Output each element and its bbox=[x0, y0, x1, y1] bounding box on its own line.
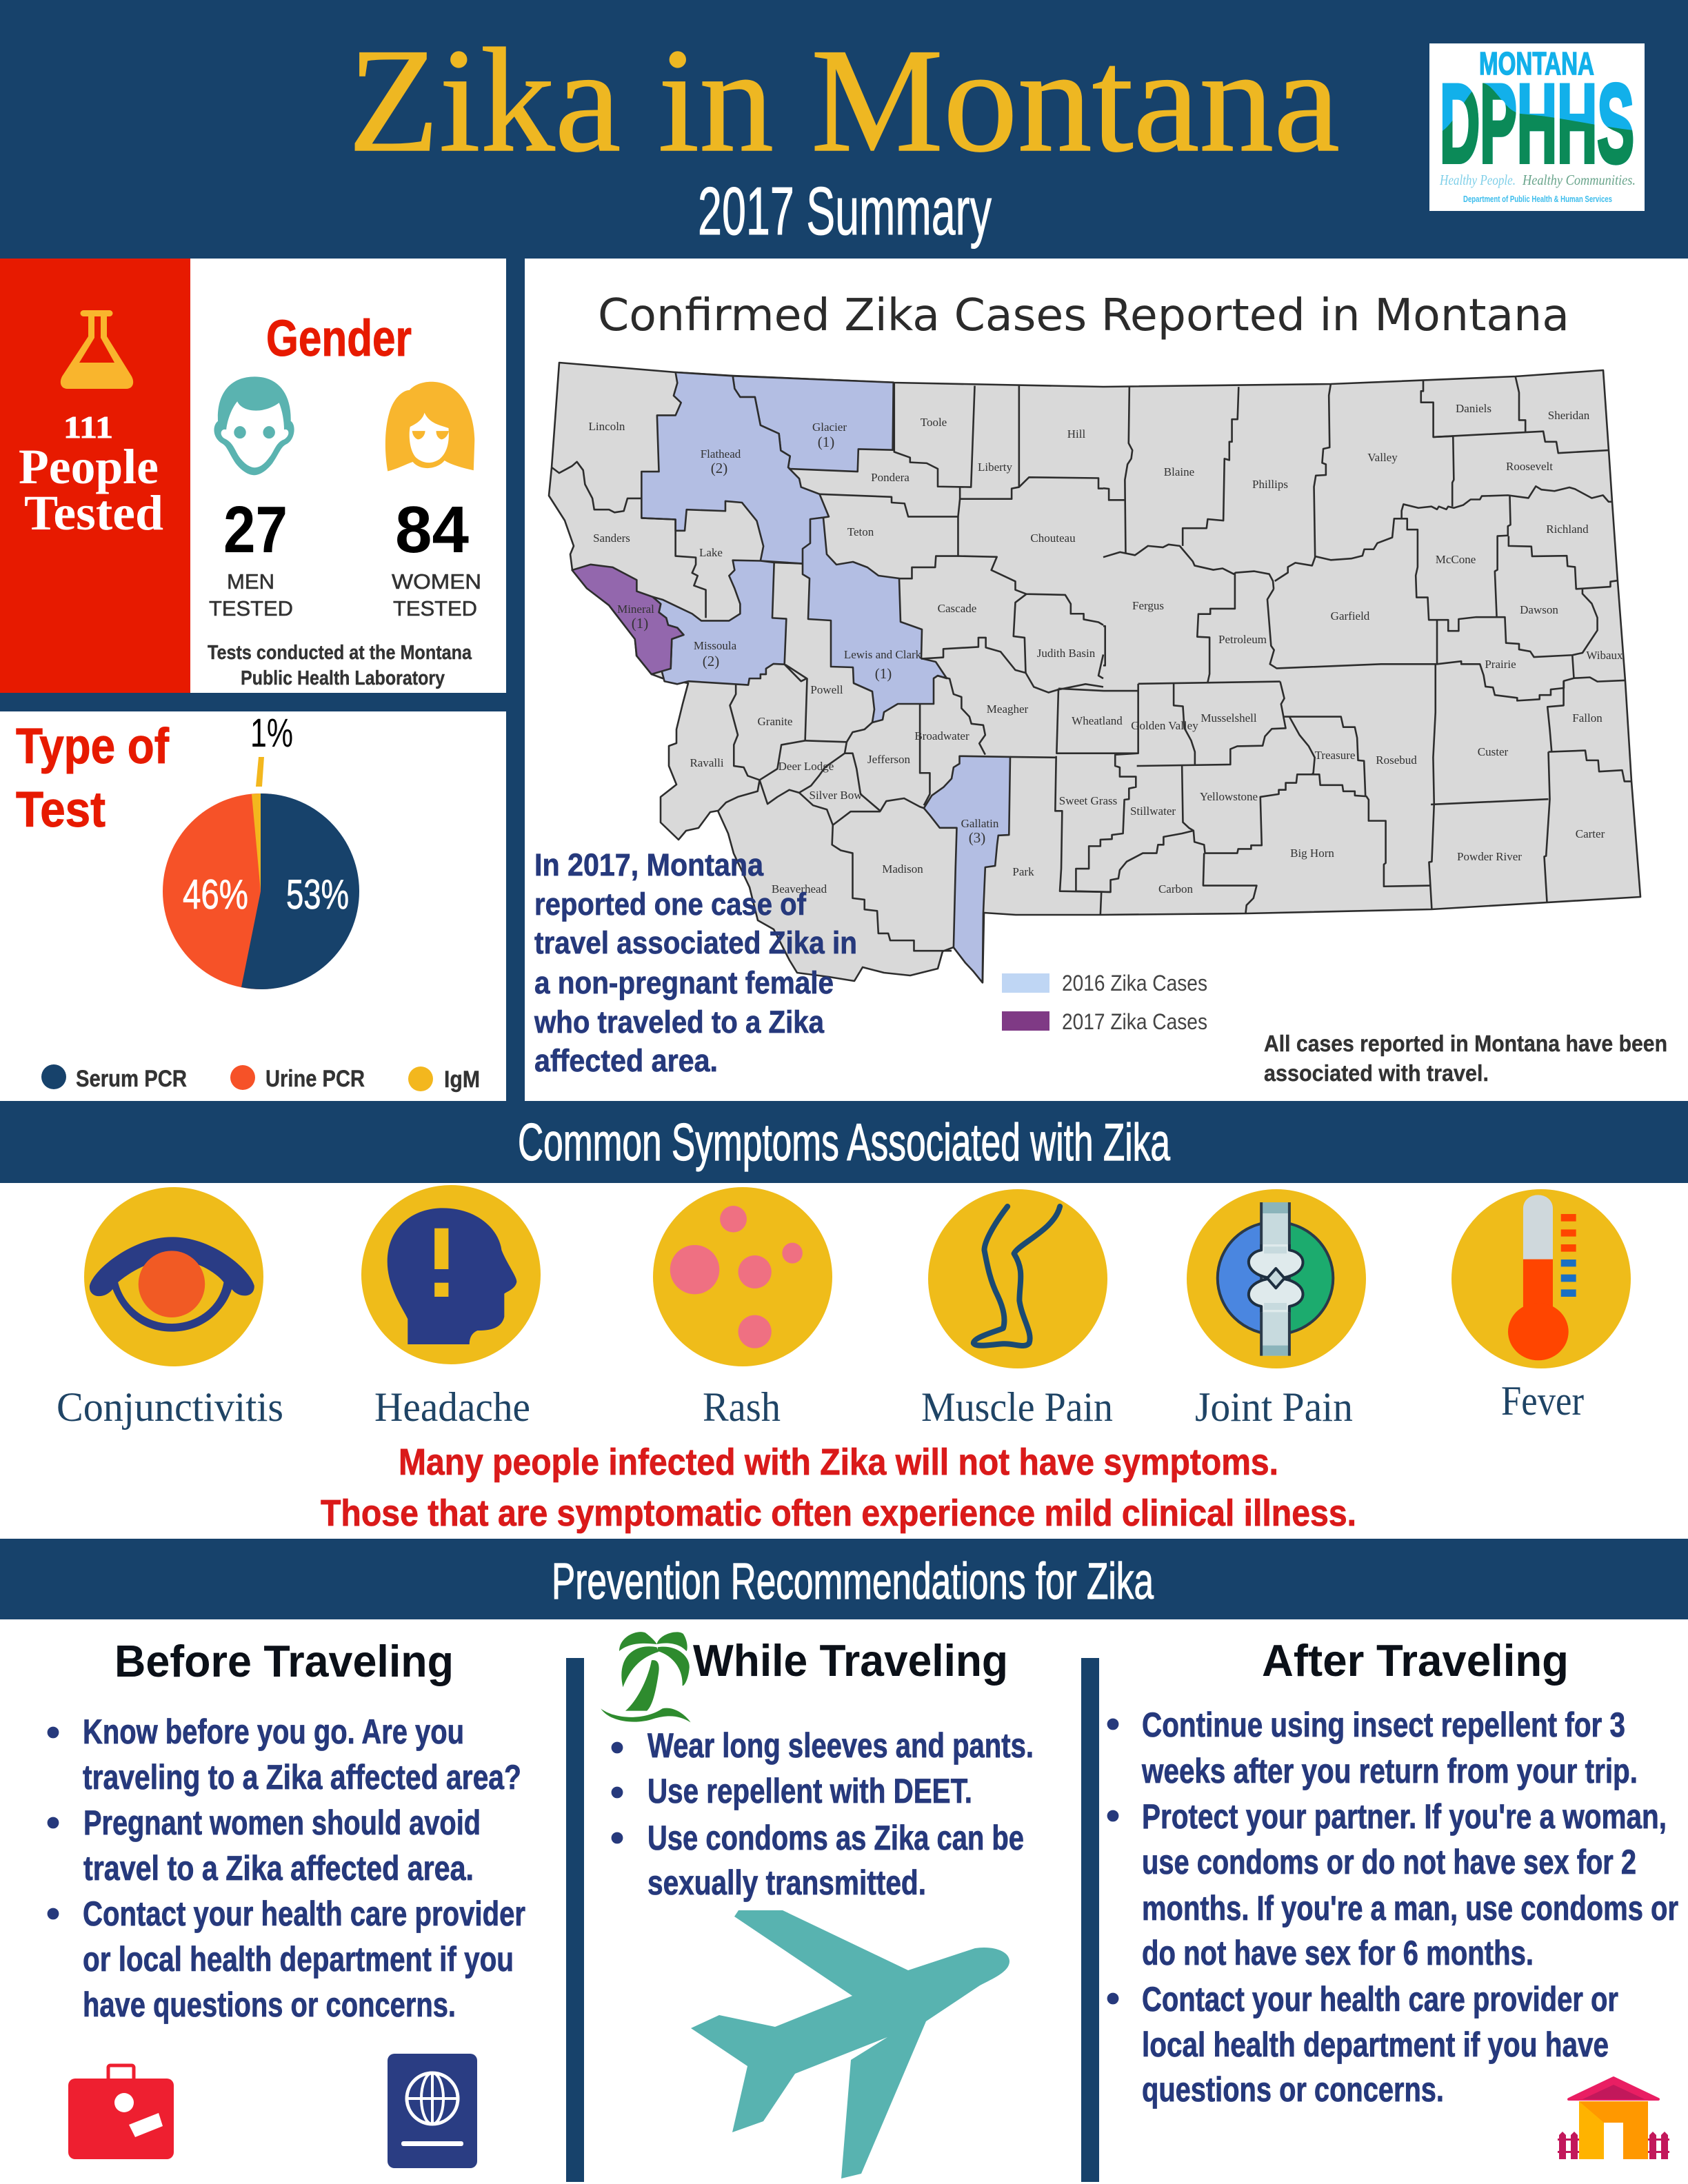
county labels: Sweet Grass bbox=[1059, 794, 1117, 807]
men tested: 27 bbox=[223, 493, 288, 567]
county labels: Ravalli bbox=[690, 756, 724, 769]
county labels: Park bbox=[1012, 865, 1034, 878]
county labels: Valley bbox=[1367, 451, 1398, 464]
county labels: Broadwater bbox=[914, 729, 969, 742]
county labels: (2) bbox=[703, 653, 719, 669]
heading: While Traveling bbox=[693, 1635, 1008, 1686]
county labels: Powder River bbox=[1457, 850, 1522, 863]
text: 2017 case narrative: affected area. bbox=[534, 1043, 718, 1078]
logo: Montana DPHHS: Healthy Communities. bbox=[1522, 172, 1636, 188]
icon: passport bbox=[388, 2054, 477, 2168]
pie chart: 53% bbox=[286, 871, 349, 918]
note: travel associated: associated with travel. bbox=[1264, 1060, 1489, 1086]
callout: mild illness: Many people infected with Zika will not have symptoms. bbox=[399, 1442, 1278, 1483]
note: laboratory bbox=[208, 642, 472, 689]
pie legend: IgM bbox=[444, 1066, 480, 1093]
county labels: (2) bbox=[711, 460, 727, 476]
symptom: fever: Fever bbox=[1501, 1378, 1584, 1424]
county labels: Daniels bbox=[1456, 402, 1491, 415]
people tested count: People bbox=[19, 439, 159, 494]
pie legend: Serum PCR bbox=[76, 1066, 187, 1092]
county labels: Fallon bbox=[1572, 711, 1602, 725]
bullet list: Pregnant women should avoid bbox=[83, 1803, 481, 1842]
county borders: northwest bbox=[552, 383, 1103, 693]
heading: type of test: Type of bbox=[16, 719, 170, 774]
county labels: Garfield bbox=[1331, 609, 1370, 623]
text: 2017 case narrative: who traveled to a Zika bbox=[534, 1004, 825, 1040]
county labels: Flathead bbox=[701, 447, 741, 461]
county labels: Deer Lodge bbox=[778, 760, 834, 773]
county labels: Phillips bbox=[1252, 478, 1288, 491]
men tested bbox=[209, 493, 293, 620]
county borders: southeast bbox=[1055, 665, 1631, 915]
bullet list: Use condoms as Zika can be bbox=[647, 1819, 1024, 1857]
county labels: Lake bbox=[699, 546, 723, 559]
panel: symptoms bbox=[57, 1185, 1631, 1534]
bullet list: sexually transmitted. bbox=[647, 1863, 926, 1902]
logo: Montana DPHHS: Healthy People. bbox=[1439, 172, 1516, 188]
icon: house bbox=[1558, 2078, 1669, 2159]
county labels: (1) bbox=[875, 665, 892, 682]
women tested: TESTED bbox=[393, 596, 477, 620]
logo: Montana DPHHS bbox=[1429, 43, 1645, 211]
county labels: Treasure bbox=[1315, 749, 1355, 762]
navy gutters between top panels bbox=[0, 259, 525, 1101]
county labels bbox=[589, 402, 1623, 896]
county labels: Cascade bbox=[938, 602, 976, 615]
map legend bbox=[1002, 971, 1207, 1034]
icon: woman bbox=[385, 382, 474, 471]
county labels: Madison bbox=[882, 862, 923, 876]
county labels: Beaverhead bbox=[772, 882, 827, 896]
county labels: Rosebud bbox=[1376, 754, 1417, 767]
county labels: Golden Valley bbox=[1131, 719, 1198, 732]
people tested count: 111 bbox=[63, 410, 113, 445]
callout: mild illness: Those that are symptomatic often experience mild clinical illness. bbox=[321, 1493, 1356, 1534]
pie legend: Urine PCR bbox=[265, 1066, 365, 1092]
text: 2017 case narrative: travel associated Zika in bbox=[534, 925, 857, 960]
bullet list: questions or concerns. bbox=[1142, 2070, 1444, 2109]
symptom: fever bbox=[1451, 1189, 1631, 1424]
icon: flask bbox=[61, 310, 133, 389]
county labels: Petroleum bbox=[1218, 633, 1267, 646]
logo: Montana DPHHS: MONTANA bbox=[1479, 46, 1594, 81]
county labels: Pondera bbox=[871, 471, 910, 484]
section banner: symptoms: Common Symptoms Associated with Zika bbox=[518, 1113, 1170, 1172]
county labels: Judith Basin bbox=[1037, 647, 1096, 660]
county labels: Toole bbox=[921, 416, 947, 429]
county labels: Dawson bbox=[1520, 603, 1558, 616]
map legend: 2016 Zika Cases bbox=[1062, 971, 1207, 995]
county labels: (1) bbox=[818, 434, 834, 450]
county labels: Carter bbox=[1576, 827, 1605, 840]
panel: while traveling bbox=[601, 1632, 1034, 2178]
symptom: muscle pain bbox=[921, 1189, 1113, 1430]
section banner: prevention bbox=[0, 1539, 1688, 1619]
county labels: (3) bbox=[969, 829, 985, 846]
county labels: Lewis and Clark bbox=[844, 648, 922, 661]
county: Glacier and Flathead bbox=[572, 372, 894, 685]
symptom: joint pain bbox=[1187, 1189, 1366, 1430]
symptom: conjunctivitis: Conjunctivitis bbox=[57, 1384, 283, 1430]
section banner: prevention: Prevention Recommendations for Zika bbox=[552, 1553, 1154, 1610]
bullet list bbox=[48, 1712, 525, 2024]
note: travel associated bbox=[1264, 1031, 1667, 1086]
county labels: Granite bbox=[758, 715, 792, 728]
text: 2017 case narrative: reported one case of bbox=[534, 887, 807, 922]
county labels: Big Horn bbox=[1290, 847, 1334, 860]
bullet list: Know before you go. Are you bbox=[83, 1712, 464, 1751]
heading: Before Traveling bbox=[114, 1636, 454, 1686]
panel: people tested bbox=[0, 259, 190, 693]
heading: type of test: Test bbox=[16, 782, 106, 838]
county labels: Lincoln bbox=[589, 420, 625, 433]
county labels: Custer bbox=[1478, 745, 1509, 758]
column divider bbox=[566, 1658, 584, 2182]
symptom: rash: Rash bbox=[703, 1384, 781, 1430]
panel: after traveling bbox=[1107, 1635, 1678, 2159]
county labels: Powell bbox=[810, 683, 843, 696]
symptom: headache: Headache bbox=[374, 1384, 530, 1430]
title: Zika in Montana bbox=[348, 18, 1340, 183]
county labels: Prairie bbox=[1485, 658, 1516, 671]
section banner: symptoms bbox=[0, 1101, 1688, 1183]
women tested bbox=[392, 493, 481, 620]
bullet list: Wear long sleeves and pants. bbox=[647, 1726, 1034, 1765]
county labels: (1) bbox=[632, 615, 648, 631]
county borders: northeast bbox=[1103, 376, 1625, 700]
county labels: Richland bbox=[1546, 523, 1589, 536]
bullet list: Use repellent with DEET. bbox=[647, 1772, 972, 1810]
bullet list: or local health department if you bbox=[83, 1940, 514, 1979]
note: laboratory: Public Health Laboratory bbox=[241, 667, 445, 689]
icon: suitcase bbox=[68, 2065, 174, 2159]
text: 2017 case narrative bbox=[534, 847, 857, 1078]
text: 2017 case narrative: In 2017, Montana bbox=[534, 847, 764, 882]
bullet list: traveling to a Zika affected area? bbox=[83, 1758, 521, 1797]
county: Gallatin bbox=[924, 756, 1010, 982]
text: 2017 case narrative: a non-pregnant female bbox=[534, 965, 834, 1000]
county labels: Chouteau bbox=[1030, 532, 1076, 545]
panel: confirmed cases map bbox=[534, 290, 1667, 1086]
women tested: 84 bbox=[395, 493, 469, 567]
county labels: Stillwater bbox=[1130, 805, 1176, 818]
symptom: joint pain: Joint Pain bbox=[1195, 1384, 1353, 1430]
county labels: Fergus bbox=[1132, 599, 1164, 612]
map legend: 2017 Zika Cases bbox=[1062, 1009, 1207, 1034]
men tested: MEN bbox=[227, 569, 274, 594]
people tested count bbox=[19, 410, 163, 540]
note: laboratory: Tests conducted at the Montana bbox=[208, 642, 472, 664]
heading: type of test bbox=[16, 719, 170, 838]
county labels: Sanders bbox=[593, 532, 630, 545]
county labels: Sheridan bbox=[1548, 409, 1590, 422]
icon: airplane bbox=[691, 1910, 1009, 2178]
county labels: Gallatin bbox=[961, 817, 999, 830]
county labels: Glacier bbox=[812, 421, 847, 434]
county labels: Silver Bow bbox=[810, 789, 863, 802]
county labels: Meagher bbox=[987, 702, 1029, 716]
men tested: TESTED bbox=[209, 596, 293, 620]
subtitle: 2017 Summary bbox=[698, 173, 992, 249]
bullet list: have questions or concerns. bbox=[83, 1985, 456, 2024]
pie chart: 46% bbox=[183, 871, 248, 918]
pie chart bbox=[163, 711, 359, 989]
county labels: Wheatland bbox=[1072, 714, 1123, 727]
county labels: Jefferson bbox=[867, 753, 910, 766]
icon: palm tree bbox=[601, 1632, 691, 1722]
county labels: Teton bbox=[847, 525, 874, 538]
panel: type of test bbox=[0, 711, 506, 1101]
county borders: southwest bbox=[718, 665, 1056, 951]
callout: mild illness bbox=[321, 1442, 1356, 1534]
heading: After Traveling bbox=[1262, 1635, 1569, 1686]
bullet list: do not have sex for 6 months. bbox=[1142, 1934, 1534, 1972]
symptom: rash bbox=[653, 1187, 832, 1430]
bullet list: Contact your health care provider bbox=[83, 1894, 525, 1933]
pie legend bbox=[41, 1064, 480, 1093]
header banner bbox=[0, 0, 1688, 259]
bullet list bbox=[612, 1726, 1034, 1902]
county: Lewis and Clark bbox=[803, 518, 947, 722]
map of Montana counties bbox=[549, 363, 1640, 982]
people tested count: Tested bbox=[24, 485, 163, 540]
county labels: Musselshell bbox=[1200, 711, 1257, 725]
county labels: McCone bbox=[1436, 553, 1476, 566]
county labels: Wibaux bbox=[1586, 649, 1623, 662]
bullet list bbox=[1107, 1706, 1678, 2109]
county labels: Liberty bbox=[978, 461, 1013, 474]
column divider bbox=[1081, 1658, 1099, 2182]
logo: Montana DPHHS: Department of Public Health & Human Services bbox=[1463, 194, 1612, 204]
symptom: conjunctivitis bbox=[57, 1187, 283, 1430]
county labels: Hill bbox=[1067, 427, 1085, 441]
heading: gender: Gender bbox=[266, 310, 412, 367]
symptom: muscle pain: Muscle Pain bbox=[921, 1384, 1113, 1430]
panel: before traveling bbox=[48, 1636, 525, 2168]
pie chart: 1% bbox=[250, 711, 293, 756]
county labels: Blaine bbox=[1164, 465, 1194, 478]
county labels: Mineral bbox=[617, 603, 654, 616]
county labels: Yellowstone bbox=[1200, 790, 1258, 803]
panel: gender bbox=[190, 259, 506, 693]
county labels: Missoula bbox=[694, 639, 737, 652]
bullet list: travel to a Zika affected area. bbox=[83, 1849, 474, 1888]
icon: man bbox=[214, 376, 294, 475]
county labels: Carbon bbox=[1158, 882, 1194, 896]
symptom: headache bbox=[361, 1185, 541, 1430]
women tested: WOMEN bbox=[392, 569, 481, 594]
map heading: Confirmed Zika Cases Reported in Montana bbox=[598, 290, 1569, 341]
county labels: Roosevelt bbox=[1506, 460, 1553, 473]
